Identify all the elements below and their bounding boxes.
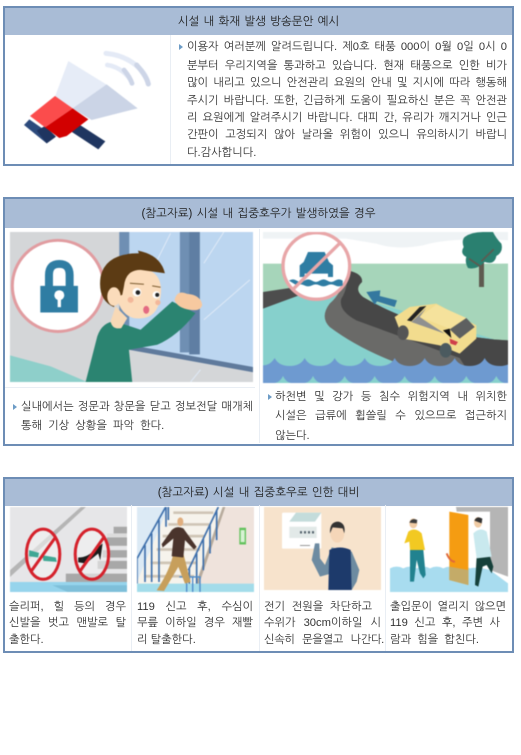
text block: report 119 and evacuate bbox=[137, 600, 253, 646]
text block: report 119 and evacuate: 무릎 이하일 경우 재빨 bbox=[137, 617, 253, 629]
heading: heavy rain in facility: (참고자료) 시설 내 집중호우가 발생하였을 경우 bbox=[141, 208, 376, 220]
text block: broadcast message: 주시기 바랍니다. 또한, 긴급하게 도움이 필요하신 분은 꼭 안전관 bbox=[187, 95, 507, 107]
text block: broadcast message: 분부터 우리지역을 통과하고 있습니다. 현재 태풍으로 인한 비가 bbox=[187, 60, 507, 72]
text block: flood zone advice: 않는다. bbox=[275, 430, 310, 442]
text block: broadcast message: 리 요원에게 알려주시기 바랍니다. 대피 간, 유리가 깨지거나 인근 bbox=[187, 112, 507, 124]
text block: broadcast message bbox=[170, 35, 507, 164]
text block: indoor advice: 통해 기상 상황을 파악 한다. bbox=[21, 420, 164, 432]
text block: door will not open: 출입문이 열리지 않으면 bbox=[390, 601, 506, 613]
heading: heavy rain preparation bbox=[5, 479, 512, 506]
text block: slippers and heels: 신발을 벗고 맨발로 탈 bbox=[9, 617, 126, 629]
illustration: people escaping door bbox=[390, 506, 508, 592]
heading: broadcast example: 시설 내 화재 발생 방송문안 예시 bbox=[178, 16, 339, 28]
heading: heavy rain in facility bbox=[5, 199, 512, 228]
text block: slippers and heels: 출한다. bbox=[9, 634, 44, 646]
panel: heavy rain in facility bbox=[3, 197, 514, 446]
text block: broadcast message: 간판이 고정되지 않아 날라올 위험이 있으니 유의하시기 바랍니 bbox=[187, 129, 507, 141]
text block: door will not open bbox=[390, 600, 506, 646]
text block: broadcast message: 다.감사합니다. bbox=[187, 147, 256, 159]
text block: door will not open: 람과 힘을 합친다. bbox=[390, 634, 479, 646]
icon: megaphone bbox=[24, 50, 152, 150]
text block: cut power and leave bbox=[264, 600, 384, 646]
text block: flood zone advice: 시설은 급류에 휩쓸릴 수 있으므로 접근하지 bbox=[275, 410, 507, 422]
text block: slippers and heels bbox=[9, 600, 126, 646]
text block: slippers and heels: 슬리퍼, 힐 등의 경우 bbox=[9, 601, 126, 613]
panel: heavy rain preparation bbox=[3, 477, 514, 653]
text block: door will not open: 119 신고 후, 주변 사 bbox=[390, 617, 500, 629]
text block: cut power and leave: 전기 전원을 차단하고 bbox=[264, 601, 372, 613]
heading: broadcast example bbox=[5, 8, 512, 35]
text block: flood zone advice: 하천변 및 강가 등 침수 위험지역 내 위치한 bbox=[275, 391, 507, 403]
illustration: flooded road with car bbox=[262, 231, 509, 384]
illustration: man closing window bbox=[9, 231, 254, 383]
text block: broadcast message: 이용자 여러분께 알려드립니다. 제0호 태풍 000이 0월 0일 0시 0 bbox=[187, 41, 507, 53]
text block: indoor advice bbox=[13, 400, 253, 432]
illustration: no slippers or heels bbox=[9, 506, 128, 593]
panel: broadcast example bbox=[3, 6, 514, 166]
divider between columns bbox=[259, 229, 260, 443]
text block: indoor advice: 실내에서는 정문과 창문을 닫고 정보전달 매개체 bbox=[21, 401, 253, 413]
text block: cut power and leave: 신속히 문을열고 나간다. bbox=[264, 634, 384, 646]
illustration: man descending stairs bbox=[136, 506, 254, 593]
text block: report 119 and evacuate: 119 신고 후, 수심이 bbox=[137, 601, 253, 613]
text block: broadcast message: 많이 내리고 있으니 안전관리 요원의 안내 및 지시에 따라 행동해 bbox=[187, 77, 507, 89]
dividers between columns bbox=[131, 505, 132, 651]
text block: cut power and leave: 수위가 30cm이하일 시 bbox=[264, 617, 381, 629]
text block: flood zone advice bbox=[268, 390, 507, 442]
heading: heavy rain preparation: (참고자료) 시설 내 집중호우로 인한 대비 bbox=[158, 487, 359, 499]
text block: report 119 and evacuate: 리 탈출한다. bbox=[137, 634, 196, 646]
illustration: cutting electricity bbox=[264, 506, 382, 591]
